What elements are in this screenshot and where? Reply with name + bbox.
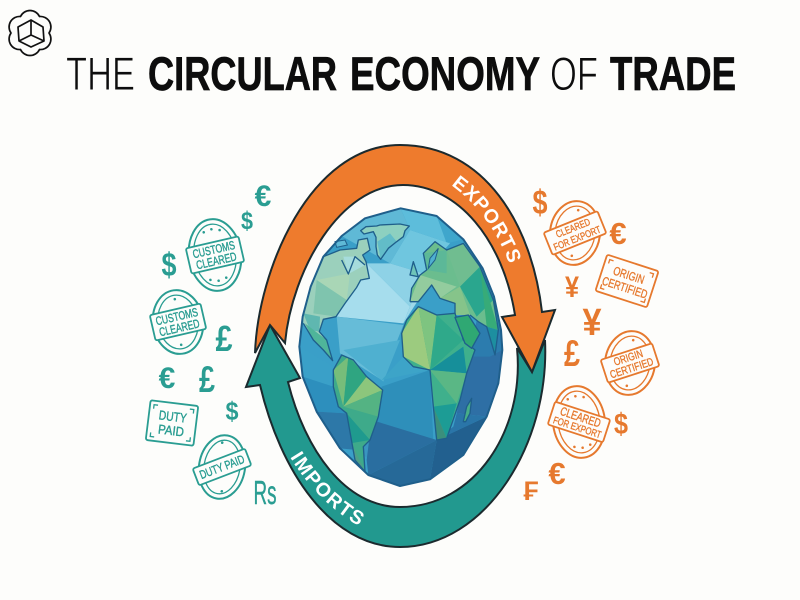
currency symbols: teal: $	[162, 246, 176, 283]
stamp: duty paid rectangle	[146, 400, 198, 446]
land: eurasia	[409, 241, 499, 356]
title: THE	[66, 47, 135, 100]
stamp: customs cleared 1	[182, 215, 248, 295]
stamp: origin certified rectangle: ORIGIN	[611, 264, 646, 287]
stamp: origin certified rectangle	[595, 255, 659, 307]
title: CIRCULAR	[148, 47, 337, 100]
label: exports: EXPORTS	[452, 175, 520, 262]
title: TRADE	[610, 47, 736, 100]
label: imports: IMPORTS	[290, 451, 364, 524]
stamp: customs cleared 2: CLEARED	[158, 316, 201, 339]
stamp: customs cleared 2	[147, 287, 209, 357]
stamp: duty paid round	[188, 431, 256, 503]
land: north america	[300, 237, 373, 363]
currency symbols: orange: ¥	[582, 302, 602, 344]
stamp: duty paid rectangle: DUTY	[158, 407, 188, 426]
land: africa	[400, 303, 480, 443]
currency symbols: teal	[159, 180, 276, 511]
currency symbols: orange: €	[609, 216, 627, 251]
currency symbols: teal: $	[226, 396, 239, 426]
stamp: cleared for export 2: FOR EXPORT	[552, 415, 602, 441]
stamp: duty paid round: DUTY PAID	[198, 452, 247, 482]
stamp: customs cleared 2: CUSTOMS	[154, 305, 199, 328]
arrow: exports	[255, 145, 555, 372]
currency symbols: orange: £	[564, 333, 580, 374]
stamp: origin certified rectangle: CERTIFIED	[600, 274, 650, 302]
stamp: cleared for export 1: FOR EXPORT	[552, 225, 603, 253]
currency symbols: orange: ¥	[565, 271, 579, 304]
stamp: origin certified round	[596, 327, 664, 399]
currency symbols: teal: $	[241, 207, 253, 235]
currency symbols: teal: €	[255, 180, 272, 213]
land: british isles	[410, 262, 418, 277]
stamp: customs cleared 1: CUSTOMS	[191, 238, 236, 261]
currency symbols: orange: ₣	[523, 476, 539, 506]
currency symbols: teal: €	[159, 362, 176, 395]
stamp: cleared for export 2: CLEARED	[558, 404, 603, 430]
globe	[290, 200, 510, 490]
land: south america	[332, 354, 384, 471]
currency symbols: teal: £	[216, 318, 232, 359]
stamp: customs cleared 1: CLEARED	[195, 249, 238, 272]
arrow: imports	[246, 325, 545, 547]
currency symbols: orange	[523, 184, 628, 506]
currency symbols: orange: $	[614, 408, 628, 441]
stamp: origin certified round: CERTIFIED	[609, 356, 655, 381]
currency symbols: orange: $	[532, 184, 548, 222]
title: OF	[550, 47, 598, 100]
land: greenland	[361, 224, 409, 259]
currency symbols: teal: £	[199, 359, 215, 400]
title	[66, 47, 736, 100]
currency symbols: orange: €	[548, 456, 566, 491]
stamp: origin certified round: ORIGIN	[612, 348, 645, 369]
globe outline	[299, 208, 502, 486]
title: ECONOMY	[350, 47, 540, 100]
stamp: cleared for export 1	[540, 197, 610, 269]
stamp: cleared for export 2	[543, 382, 615, 462]
land: arabia	[455, 315, 480, 348]
stamp: duty paid rectangle: PAID	[157, 421, 185, 439]
stamp: cleared for export 1: CLEARED	[555, 217, 592, 241]
icon: logo	[9, 10, 51, 56]
land: madagascar	[463, 398, 472, 422]
currency symbols: teal: Rs	[254, 474, 276, 511]
